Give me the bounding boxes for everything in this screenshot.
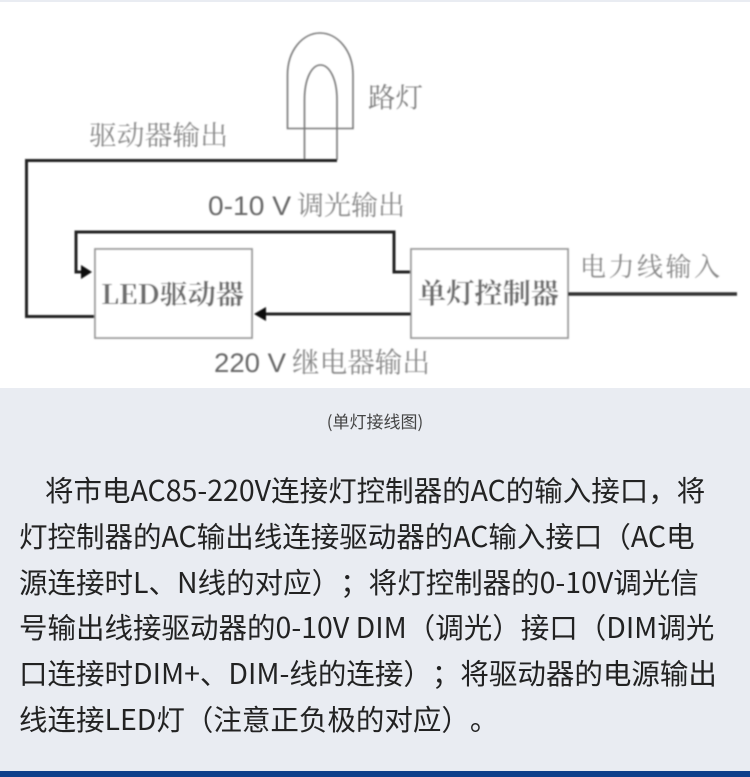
label: dimming output: 0-10 V — [208, 191, 291, 221]
box: LED driver: LED驱动器 — [101, 273, 244, 312]
label: driver output: 驱动器输出 — [89, 114, 228, 153]
label: power line input: 电力线输入 — [580, 247, 720, 284]
box: LED driver — [95, 249, 252, 338]
wire: power input — [568, 292, 737, 296]
label: dimming output: 调光输出 — [297, 184, 405, 223]
caption: (单灯接线图) — [327, 408, 423, 433]
wire: dimming output with arrow — [76, 232, 411, 279]
label: street lamp: 路灯 — [368, 75, 423, 115]
text block: wiring instructions: 线连接LED灯（注意正负极的对应）。 — [19, 698, 498, 739]
footer bar — [0, 771, 750, 777]
text block: wiring instructions: 源连接时L、N线的对应）；将灯控制器的0-10V调光信 — [19, 561, 699, 602]
label: relay output — [214, 340, 430, 380]
text block: wiring instructions: 将市电AC85-220V连接灯控制器的AC的输入接口，将 — [45, 469, 705, 510]
text block: wiring instructions: 口连接时DIM+、DIM-线的连接）；将驱动器的电源输出 — [19, 652, 717, 693]
panel: wiring diagram — [0, 2, 750, 388]
box: single lamp controller — [411, 249, 568, 338]
label: relay output: 220 V — [214, 348, 286, 378]
label: relay output: 继电器输出 — [292, 340, 430, 380]
wire: relay output with arrow — [254, 307, 411, 321]
text block: wiring instructions: 灯控制器的AC输出线连接驱动器的AC输入接口（AC电 — [19, 515, 695, 556]
label: dimming output — [208, 184, 405, 223]
text block: wiring instructions — [19, 469, 717, 739]
icon: street lamp — [288, 33, 353, 160]
text block: wiring instructions: 号输出线接驱动器的0-10V DIM（调光）接口（DIM调光 — [19, 606, 714, 647]
wire: driver output to lamp — [26, 160, 337, 316]
box: single lamp controller: 单灯控制器 — [418, 272, 559, 312]
